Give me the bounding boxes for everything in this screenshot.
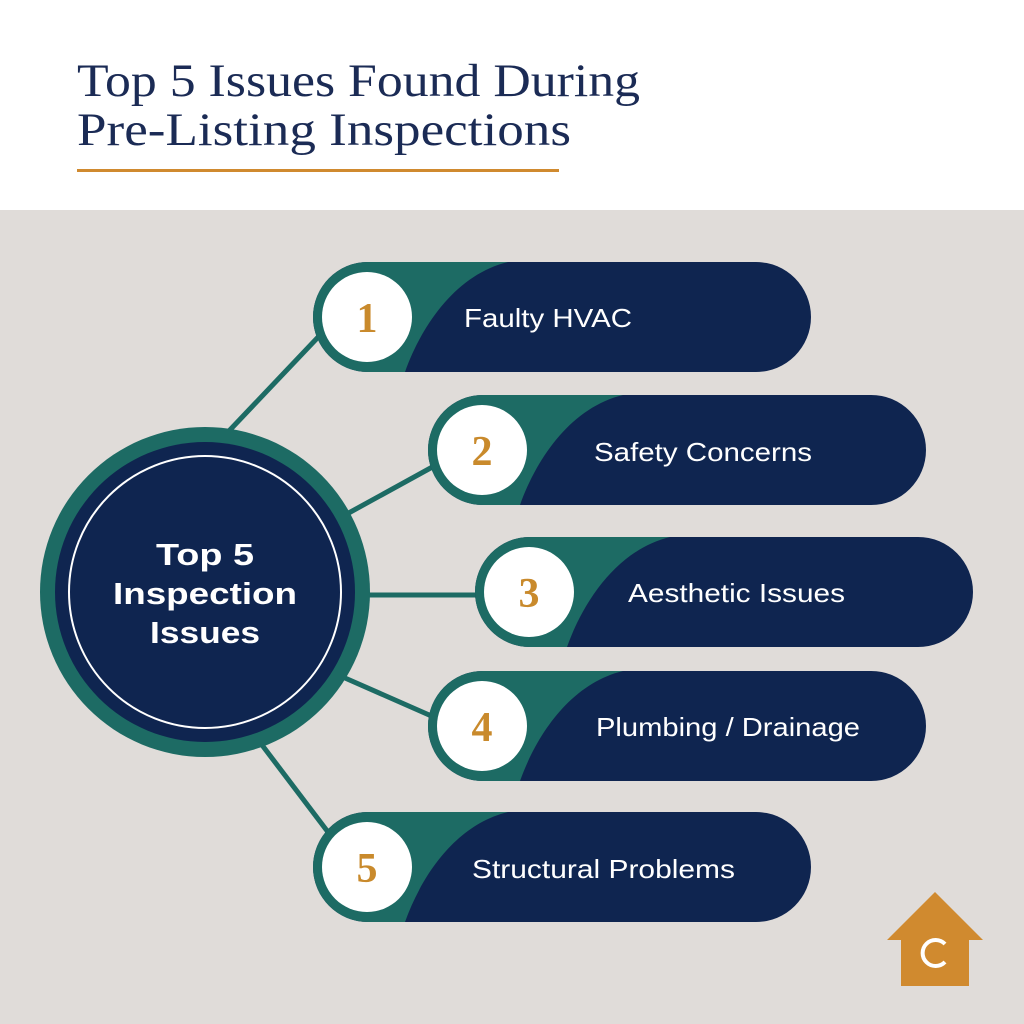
title (77, 55, 640, 156)
pill 1: Faulty HVAC (464, 303, 632, 333)
central circle: Inspection (113, 576, 297, 611)
pill 4: Plumbing / Drainage (596, 712, 860, 742)
pill 4 (428, 671, 926, 781)
pill 1 (313, 262, 811, 372)
pill 2: Safety Concerns (594, 437, 812, 467)
pill 5 (313, 812, 811, 922)
pill 3: 3 (518, 571, 540, 617)
pill 5: 5 (356, 846, 378, 892)
title: Pre-Listing Inspections (77, 104, 571, 156)
connector lines (228, 333, 480, 840)
pill 5: Structural Problems (472, 854, 735, 884)
pill 1: 1 (356, 296, 378, 342)
central circle (40, 427, 370, 757)
icon: house logo (887, 892, 983, 986)
central circle: Issues (150, 615, 260, 650)
pill 2: 2 (472, 429, 492, 475)
pill 2 (428, 395, 926, 505)
pill 3 (475, 537, 973, 647)
title: Top 5 Issues Found During (77, 55, 640, 107)
central circle: Top 5 (156, 537, 254, 572)
title underline (77, 169, 559, 172)
pill 4: 4 (472, 705, 492, 751)
pill 3: Aesthetic Issues (628, 578, 845, 608)
